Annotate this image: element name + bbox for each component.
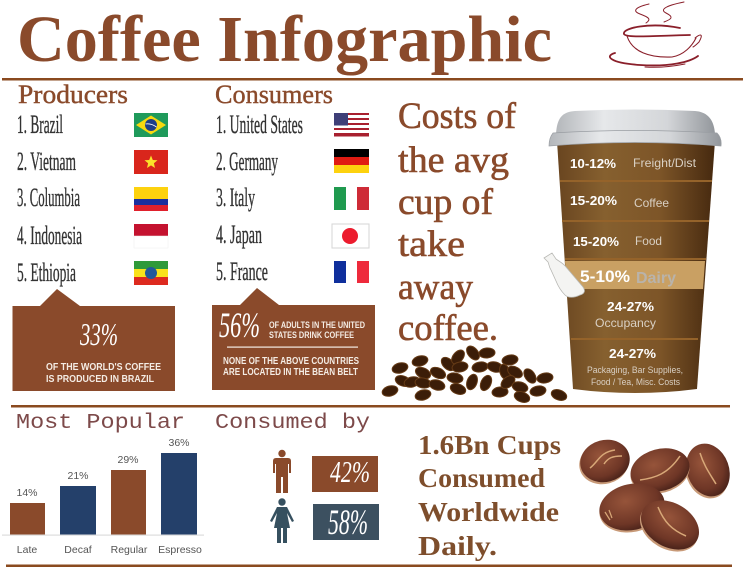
bean	[631, 490, 708, 562]
bar: Late	[10, 487, 45, 556]
heading: costs of the avg cup: cup of	[398, 182, 494, 223]
coffee beans pile	[381, 344, 568, 404]
bar: Late: Late	[17, 544, 37, 556]
icon: flag of France	[334, 261, 369, 283]
text block: cups consumed	[418, 430, 561, 561]
icon: flag of Italy	[334, 187, 369, 210]
cup labels: 15-20%	[570, 194, 617, 208]
icon: flag of Brazil	[134, 113, 168, 137]
heading: costs of the avg cup: take	[398, 224, 465, 265]
callout: US adults: STATES DRINK COFFEE	[269, 330, 354, 340]
heading: most popular: Most Popular	[16, 412, 185, 435]
icon: flag of United States	[334, 113, 369, 137]
producers list: 4. Indonesia	[17, 221, 82, 250]
divider: top rule	[2, 78, 743, 80]
heading: costs of the avg cup	[398, 96, 517, 349]
cup lid	[549, 110, 721, 146]
cup labels: Occupancy	[595, 316, 656, 330]
icon: flag of Indonesia	[134, 224, 168, 248]
text block: cups consumed: 1.6Bn Cups	[418, 430, 561, 460]
title: Coffee Infographic	[17, 3, 552, 76]
callout: US adults: ARE LOCATED IN THE BEAN BELT	[223, 367, 358, 378]
producers list: 5. Ethiopia	[17, 258, 76, 287]
consumers list: 1. United States	[216, 110, 303, 139]
callout: US adults: NONE OF THE ABOVE COUNTRIES	[223, 356, 359, 367]
bar: Decaf: 21%	[67, 470, 89, 482]
callout: US adults	[212, 288, 375, 390]
cup labels: Food / Tea, Misc. Costs	[591, 377, 680, 387]
bean	[626, 442, 694, 500]
bean	[574, 434, 635, 490]
percentage: women	[313, 502, 379, 542]
cup labels: Food	[635, 234, 662, 248]
text block: cups consumed: Consumed	[418, 463, 545, 493]
bar: Late: 14%	[16, 487, 38, 499]
icon: flag of Colombia	[134, 187, 168, 211]
callout: Brazil share: 33%	[79, 316, 118, 352]
consumers list	[216, 110, 303, 286]
callout: US adults: OF ADULTS IN THE UNITED	[269, 320, 365, 330]
icon: flag of Japan	[332, 224, 369, 248]
text block: cups consumed: Worldwide	[418, 497, 559, 527]
heading: costs of the avg cup: away	[398, 267, 473, 308]
percentage: men	[312, 454, 378, 492]
bar: Regular	[111, 454, 148, 556]
icon: man	[273, 450, 291, 493]
cup labels: 24-27%	[609, 347, 656, 361]
cup labels: Packaging, Bar Supplies,	[587, 365, 683, 375]
bean	[595, 478, 669, 538]
consumers list: 5. France	[216, 257, 268, 286]
icon: flag of Germany	[334, 149, 369, 173]
callout: Brazil share	[12, 289, 175, 391]
bar: Espresso: Espresso	[158, 544, 202, 556]
divider: bottom rule	[6, 564, 732, 567]
cup labels	[570, 156, 697, 387]
producers list: 3. Columbia	[17, 183, 80, 212]
cup labels: 5-10%	[580, 267, 630, 286]
cup body	[557, 141, 715, 393]
bar: Regular: Regular	[111, 544, 148, 556]
takeaway cup chart	[544, 110, 721, 393]
bar: Decaf: Decaf	[64, 544, 92, 556]
bar: Decaf	[60, 470, 96, 556]
heading: consumers: Consumers	[215, 80, 333, 109]
panel: consumers	[215, 80, 369, 286]
callout: Brazil share: IS PRODUCED IN BRAZIL	[46, 374, 154, 385]
icon: woman	[270, 498, 294, 543]
icon: coffee cup with steam	[610, 2, 701, 67]
bar: Espresso	[158, 437, 202, 556]
cup labels: Freight/Dist	[633, 156, 697, 170]
producers list: 1. Brazil	[17, 110, 63, 139]
cup labels: 15-20%	[573, 235, 619, 249]
heading: consumed by: Consumed by	[215, 412, 370, 435]
heading: producers: Producers	[18, 80, 128, 109]
percentage: men: 42%	[330, 454, 370, 489]
heading: costs of the avg cup: the avg	[398, 140, 509, 181]
bar: Espresso: 36%	[168, 437, 190, 449]
consumers list: 2. Germany	[216, 147, 278, 176]
bar: Regular: 29%	[117, 454, 139, 466]
cup labels: Dairy	[636, 270, 676, 287]
cup labels: 10-12%	[570, 157, 616, 171]
percentage: women: 58%	[328, 502, 368, 542]
icon: milk bottle	[544, 253, 584, 297]
callout: US adults: 56%	[219, 305, 260, 345]
heading: costs of the avg cup: Costs of	[398, 96, 517, 137]
producers list	[17, 110, 82, 287]
text block: cups consumed: Daily.	[418, 531, 497, 561]
cup labels: 24-27%	[607, 300, 654, 314]
panel: producers	[17, 80, 168, 287]
icon: flag of Vietnam	[134, 150, 168, 174]
dairy band	[565, 261, 705, 289]
consumers list: 4. Japan	[216, 220, 262, 249]
producers list: 2. Vietnam	[17, 147, 76, 176]
callout: Brazil share: OF THE WORLD'S COFFEE	[46, 362, 161, 373]
heading: costs of the avg cup: coffee.	[398, 308, 498, 349]
coffee beans illustration	[574, 434, 737, 562]
consumers list: 3. Italy	[216, 183, 255, 212]
cup section rules	[560, 181, 712, 339]
divider: middle rule	[11, 405, 730, 408]
bean	[678, 437, 737, 505]
cup labels: Coffee	[634, 196, 669, 210]
icon: flag of Ethiopia	[134, 261, 168, 285]
bar chart: most popular coffees	[2, 437, 204, 556]
